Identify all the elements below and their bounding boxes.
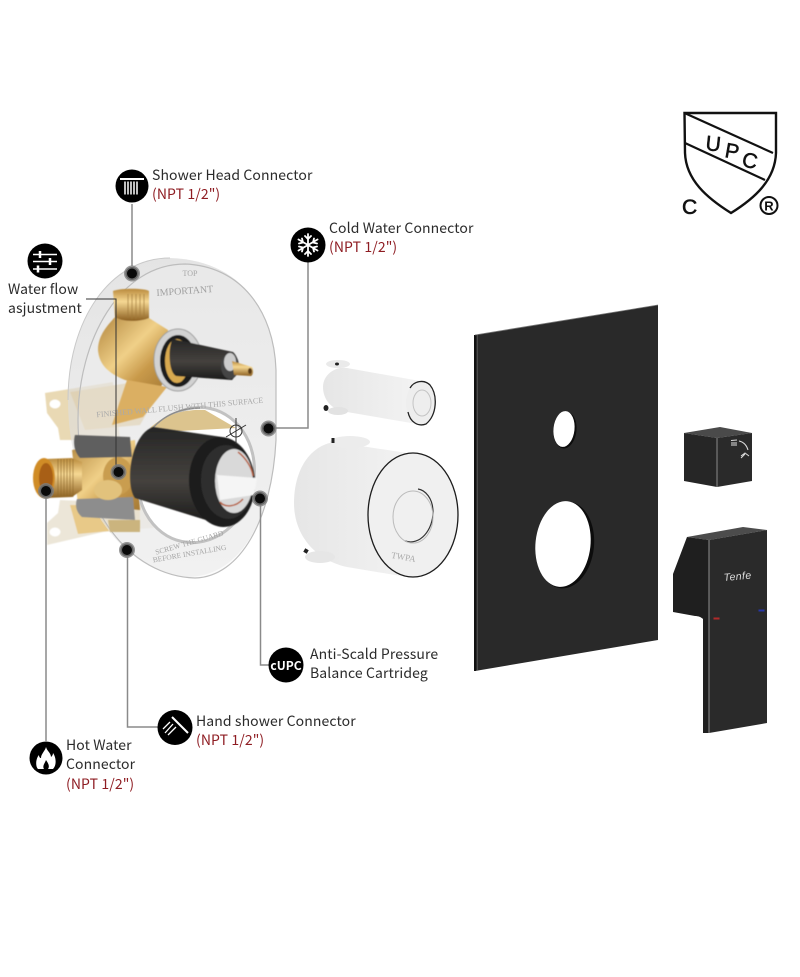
upper brass body [98,289,170,425]
UPC certification mark: R [764,198,774,214]
lower brass manifold and side ports [72,435,140,532]
knob symbol [731,440,749,458]
label: shower head connector: Shower Head Connector [152,165,313,185]
label: shower head connector: (NPT 1/2") [152,184,220,204]
small trim sleeve [323,360,436,425]
cube diverter knob [684,427,752,487]
icon: snowflake [290,228,326,262]
UPC certification mark [682,113,778,219]
transparent back plate [68,258,276,578]
pressure balance cartridge [130,427,258,529]
cold mark [758,610,764,612]
leader lines [46,204,308,741]
plate lettering: FINISHED WALL FLUSH WITH THIS SURFACE [96,396,264,419]
cross pin [226,418,246,444]
label: water flow adjustment: Water flow [8,279,78,299]
hot water brass inlet [33,458,82,498]
small hole [552,410,578,450]
plate lettering [96,396,264,564]
central opening ring [125,396,267,554]
lever handle [673,527,767,733]
label: cold water connector: Cold Water Connector [329,218,474,238]
UPC certification mark: C [740,148,760,174]
label: hot water connector: (NPT 1/2") [66,774,134,794]
icon: cUPC badge: cUPC [270,657,302,674]
icon: flame [30,742,62,774]
plate lettering: SCREW THE GUARD [154,528,225,557]
transparent back plate: IMPORTANT [156,284,214,299]
label: anti-scald cartridge: Anti-Scald Pressure [310,644,438,664]
UPC certification mark: U [704,132,722,157]
plate lettering: BEFORE INSTALLING [152,543,228,564]
icon: sliders [28,244,62,278]
large trim sleeve: TWPA [391,550,417,564]
large trim sleeve [294,436,458,577]
icon: shower head [116,170,148,202]
transparent back plate: TOP [183,269,198,278]
label: hand shower connector: (NPT 1/2") [196,730,264,750]
UPC certification mark: C [682,196,697,219]
large hole [532,499,598,591]
water flow leader line [86,299,116,466]
marker dots [40,267,275,556]
icon: cUPC badge [268,648,304,682]
UPC certification mark: P [723,139,741,164]
label: hand shower connector: Hand shower Connector [196,711,356,731]
icon: hand shower [158,710,192,745]
label: cold water connector: (NPT 1/2") [329,237,397,257]
mounting bracket [45,382,163,545]
label: anti-scald cartridge: Balance Cartrideg [310,663,428,683]
label: water flow adjustment: asjustment [8,298,82,318]
valve assembly [33,258,276,578]
label: hot water connector: Connector [66,754,136,774]
black cover plate [475,305,658,671]
hot mark [714,618,720,620]
brand name: Tenfe [723,570,752,584]
label: hot water connector: Hot Water [66,735,132,755]
shower diverter stem [154,329,253,391]
